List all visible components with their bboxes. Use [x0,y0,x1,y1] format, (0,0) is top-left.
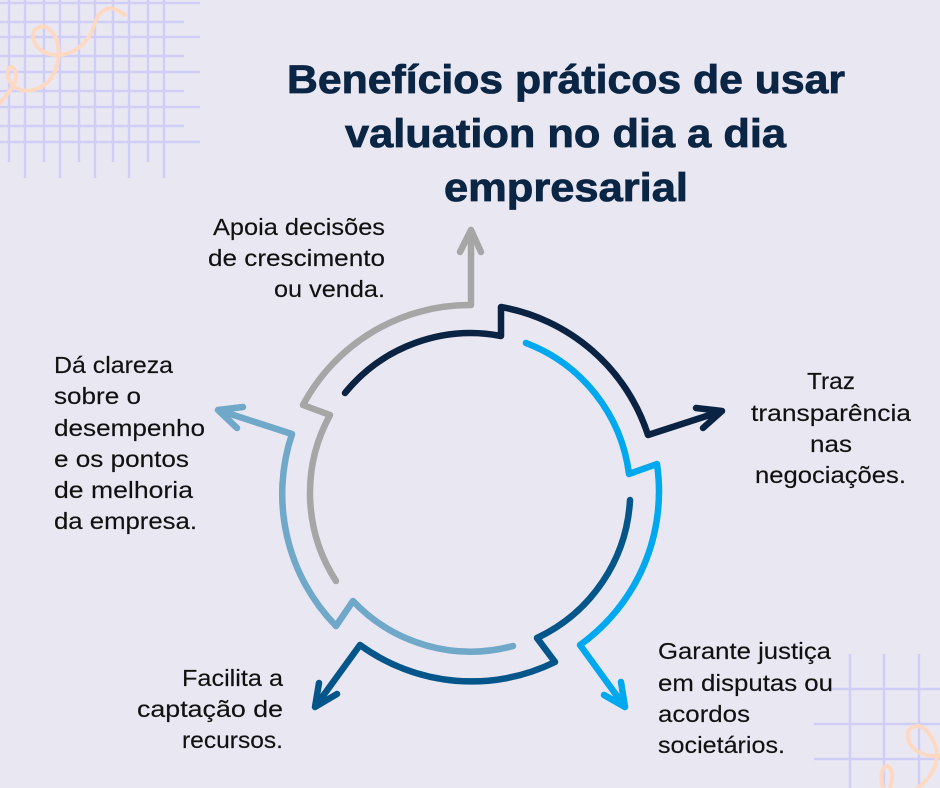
arrow: dark blue, fundraising [315,500,630,707]
text: transparency in negotiations: transparência [751,400,912,426]
text: growth or sale decisions: Apoia decisões [213,214,385,240]
arrow: cyan, disputes [526,343,659,707]
title: empresarial [444,166,688,210]
cycle diagram [218,230,722,707]
text: fairness in disputes: acordos [658,701,750,727]
text: performance clarity [54,352,205,534]
text: transparency in negotiations: nas [810,431,852,457]
text: performance clarity: de melhoria [54,477,194,503]
title: Benefícios práticos de usar [287,58,845,102]
text: fairness in disputes: Garante justiça [658,638,832,664]
text: performance clarity: sobre o [54,383,141,409]
text: performance clarity: e os pontos [54,446,189,472]
text: fundraising: Facilita a [182,665,284,691]
text: performance clarity: da empresa. [54,508,197,534]
text: fairness in disputes: em disputas ou [658,670,833,696]
text: performance clarity: Dá clareza [54,352,174,378]
text: growth or sale decisions [208,214,385,302]
text: growth or sale decisions: ou venda. [274,276,385,302]
title: valuation no dia a dia [345,112,787,156]
text: transparency in negotiations: negociações. [755,462,906,488]
arrow: navy, transparency [345,307,722,435]
text: growth or sale decisions: de crescimento [208,245,385,271]
text: fundraising: captação de [137,696,283,722]
arrow: gray, growth or sale [303,230,481,581]
text: fundraising: recursos. [182,727,283,753]
text: transparency in negotiations: Traz [807,368,855,394]
text: performance clarity: desempenho [54,415,205,441]
arrow: light blue, performance [218,407,513,652]
text: fairness in disputes [658,638,833,758]
text: fundraising [137,665,284,753]
title [287,58,845,210]
text: transparency in negotiations [751,368,912,488]
text: fairness in disputes: societários. [658,732,785,758]
